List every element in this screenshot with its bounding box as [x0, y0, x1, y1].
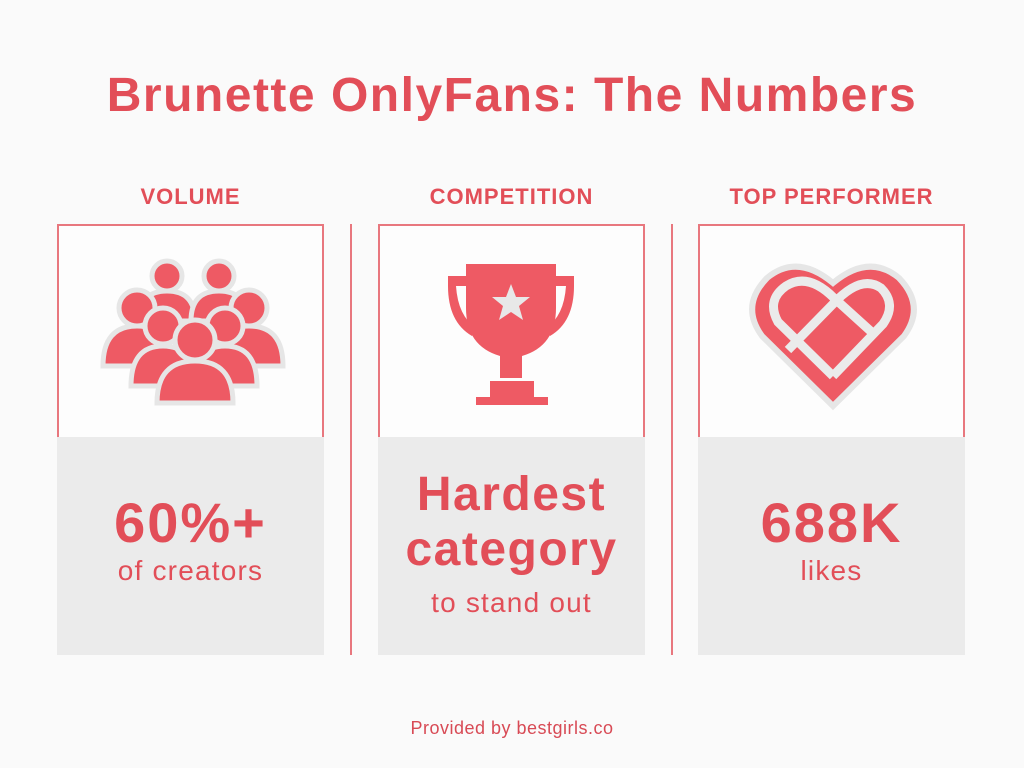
stat: top performer — [698, 437, 965, 655]
label: volume: VOLUME — [140, 184, 241, 209]
stat: top performer: likes — [800, 555, 862, 586]
label: competition: COMPETITION — [430, 184, 593, 209]
icon: heart — [749, 264, 917, 410]
divider 2 — [671, 224, 673, 655]
icon: people — [100, 258, 286, 406]
stat: competition: category — [405, 523, 618, 576]
panel: top performer icon box — [698, 224, 965, 439]
stat: top performer: 688K — [761, 491, 902, 554]
stat: volume: of creators — [118, 555, 263, 586]
stat: competition: Hardest — [417, 468, 606, 521]
stat: volume: 60%+ — [114, 491, 267, 554]
stat: competition — [378, 437, 645, 655]
panel: volume icon box — [57, 224, 324, 439]
footer: Provided by bestgirls.co — [410, 718, 614, 738]
label: top performer: TOP PERFORMER — [729, 184, 934, 209]
stat: volume — [57, 437, 324, 655]
stat: competition: to stand out — [431, 587, 592, 618]
icon: trophy — [448, 264, 574, 405]
title: Brunette OnlyFans: The Numbers — [107, 69, 917, 122]
divider 1 — [350, 224, 352, 655]
panel: competition icon box — [378, 224, 645, 439]
